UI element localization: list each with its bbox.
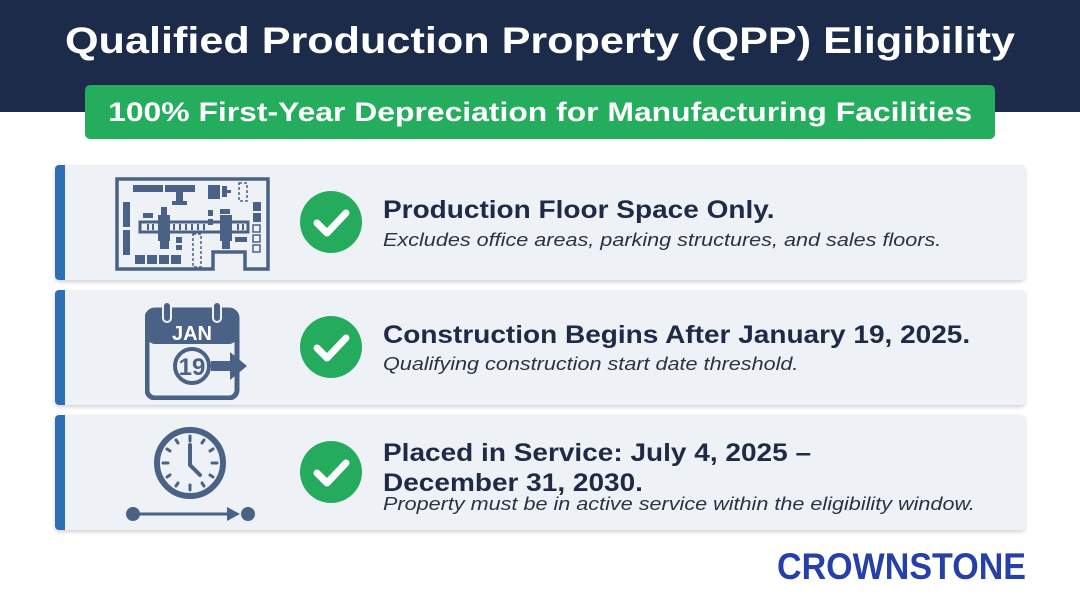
text: Property must be in active service within the eligibility window. [383, 494, 975, 514]
heading: Production Floor Space Only. [383, 196, 775, 224]
logo: CROWNSTONE [777, 546, 1026, 587]
panel: production floor [55, 165, 1025, 280]
icon: clock and timeline [126, 427, 255, 521]
subtitle banner [85, 85, 995, 139]
icon: check [300, 191, 362, 253]
subtitle banner: 100% First-Year Depreciation for Manufacturing Facilities [108, 97, 972, 127]
title: Qualified Production Property (QPP) Eligibility [65, 20, 1015, 61]
icon: check [300, 441, 362, 503]
icon: check [300, 316, 362, 378]
heading [383, 439, 811, 497]
text: Excludes office areas, parking structures, and sales floors. [383, 230, 941, 250]
icon: floor plan [115, 177, 270, 271]
heading: December 31, 2030. [383, 469, 643, 497]
icon: calendar: 19 [179, 354, 205, 381]
icon: calendar [145, 303, 247, 400]
text: Qualifying construction start date threshold. [383, 354, 798, 374]
panel: construction date [55, 290, 1025, 405]
icon: calendar: JAN [172, 323, 212, 345]
heading: Construction Begins After January 19, 2025. [383, 321, 970, 349]
panel: placed in service [55, 415, 1025, 530]
header bar [0, 0, 1080, 112]
heading: Placed in Service: July 4, 2025 – [383, 439, 811, 467]
